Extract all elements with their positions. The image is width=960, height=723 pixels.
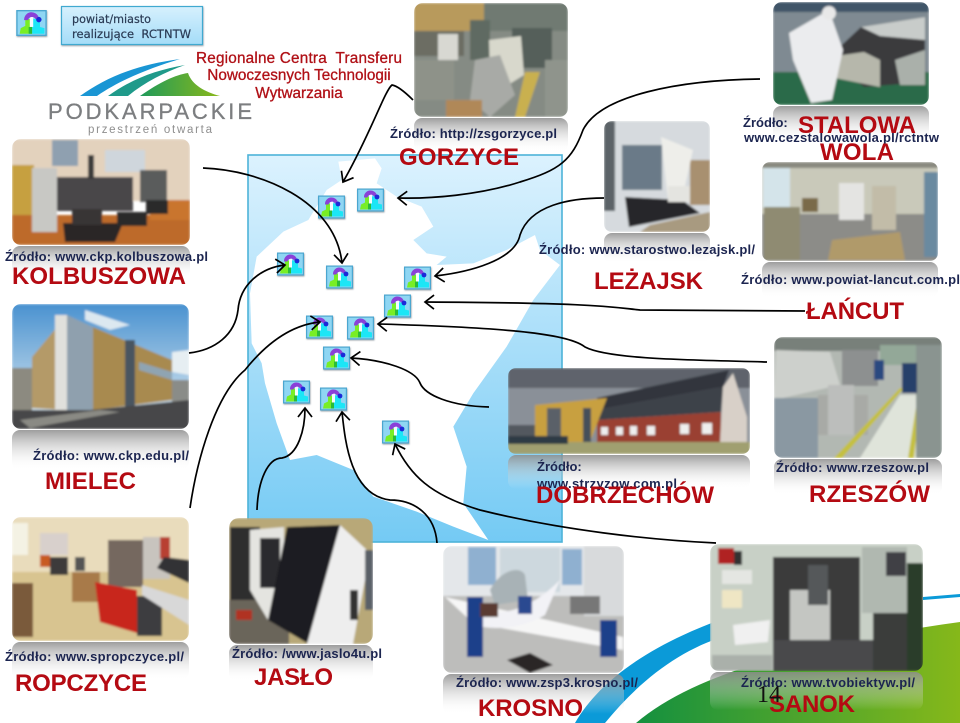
page number: 14 (757, 682, 781, 708)
map markers (278, 189, 430, 443)
caption: Łańcut: Źródło: www.powiat-lancut.com.pl (741, 272, 960, 287)
arrow: Krosno (342, 412, 437, 543)
caption: Kolbuszowa: KOLBUSZOWA (12, 263, 186, 290)
caption: Kolbuszowa: Źródło: www.ckp.kolbuszowa.pl (5, 249, 208, 264)
caption: Ropczyce: ROPCZYCE (15, 670, 147, 697)
arrow: Jasło (257, 408, 305, 510)
caption: Łańcut (741, 272, 960, 325)
title: Regionalne Centra Transferu (196, 50, 402, 67)
caption: Ropczyce: Źródło: www.spropczyce.pl/ (5, 649, 184, 664)
title: Wytwarzania (255, 85, 343, 102)
arrow: Rzeszów (378, 324, 767, 362)
caption: Gorzyce: GORZYCE (399, 144, 519, 171)
caption: Leżajsk (539, 242, 755, 295)
photo: Krosno (443, 546, 624, 673)
caption: Rzeszów: Źródło: www.rzeszow.pl (776, 460, 929, 475)
arrow: Ropczyce (190, 322, 320, 508)
photo: Sanok (710, 544, 923, 671)
caption: Stalowa Wola: www.cezstalowawola.pl/rctntw (743, 130, 940, 145)
arrow: Gorzyce (343, 85, 413, 182)
caption: Stalowa Wola: WOLA (820, 139, 894, 166)
caption: Sanok: SANOK (769, 691, 856, 718)
caption: Stalowa Wola: Źródło: (743, 115, 788, 130)
caption: Dobrzechów (536, 459, 714, 509)
photo: Ropczyce (12, 517, 189, 641)
caption: Stalowa Wola (743, 112, 940, 166)
arrow: Stalowa Wola (398, 79, 760, 198)
caption: Mielec (33, 448, 189, 495)
caption: Jasło (232, 646, 382, 691)
caption: Mielec: MIELEC (45, 468, 136, 495)
arrow: Kolbuszowa (203, 168, 342, 263)
caption: Rzeszów (776, 460, 930, 508)
arrow: Sanok (395, 444, 716, 543)
caption: Dobrzechów: Źródło: (537, 459, 582, 474)
legend box (62, 6, 202, 44)
caption: Ropczyce (5, 649, 184, 697)
caption: Mielec: Źródło: www.ckp.edu.pl/ (33, 448, 189, 463)
photo: Jasło (229, 518, 373, 644)
caption: Łańcut: ŁAŃCUT (806, 297, 904, 325)
arrow: Mielec (189, 265, 285, 353)
logo: Podkarpackie (48, 59, 252, 136)
caption: Stalowa Wola: STALOWA (798, 112, 916, 139)
photo: Stalowa Wola (773, 2, 929, 105)
map: region silhouette (250, 158, 560, 540)
logo: Podkarpackie: PODKARPACKIE (48, 99, 252, 124)
caption: Dobrzechów: www.strzyzow.com.pl (536, 476, 677, 491)
caption: Leżajsk: Źródło: www.starostwo.lezajsk.pl/ (539, 242, 755, 257)
caption: Jasło: JASŁO (254, 664, 333, 691)
caption: Dobrzechów: DOBRZECHÓW (536, 481, 714, 509)
caption: Gorzyce (390, 126, 557, 171)
caption: Krosno (456, 675, 638, 722)
map panel (248, 155, 562, 542)
caption: Rzeszów: RZESZÓW (809, 480, 930, 508)
legend icon (17, 11, 46, 35)
caption: Krosno: Źródło: www.zsp3.krosno.pl/ (456, 675, 638, 690)
logo: Podkarpackie: przestrzeń otwarta (88, 124, 213, 136)
arrow: Łańcut (425, 302, 805, 311)
legend box: powiat/miasto (72, 12, 151, 26)
photo: Dobrzechów (508, 368, 750, 454)
caption: Leżajsk: LEŻAJSK (594, 268, 704, 295)
caption: Sanok (741, 675, 915, 718)
photo: Kolbuszowa (12, 139, 190, 245)
caption: Krosno: KROSNO (478, 695, 583, 722)
photo: Rzeszów (774, 337, 942, 458)
legend box: realizujące RCTNTW (72, 27, 191, 41)
background swoosh: green (636, 622, 960, 723)
caption: Kolbuszowa (5, 249, 208, 290)
caption: Jasło: Źródło: /www.jaslo4u.pl (232, 646, 382, 661)
caption: Sanok: Źródło: www.tvobiektyw.pl/ (741, 675, 915, 690)
photo: Leżajsk (604, 121, 710, 232)
title: Nowoczesnych Technologii (207, 67, 391, 84)
photo: Łańcut (762, 162, 938, 261)
photo: Gorzyce (414, 3, 568, 117)
background swoosh: blue (575, 594, 960, 723)
caption: Gorzyce: Źródło: http://zsgorzyce.pl (390, 126, 557, 141)
arrow: Dobrzechów (351, 358, 489, 407)
title (196, 50, 402, 102)
photo: Mielec (12, 304, 189, 429)
arrow: Leżajsk (435, 198, 604, 276)
